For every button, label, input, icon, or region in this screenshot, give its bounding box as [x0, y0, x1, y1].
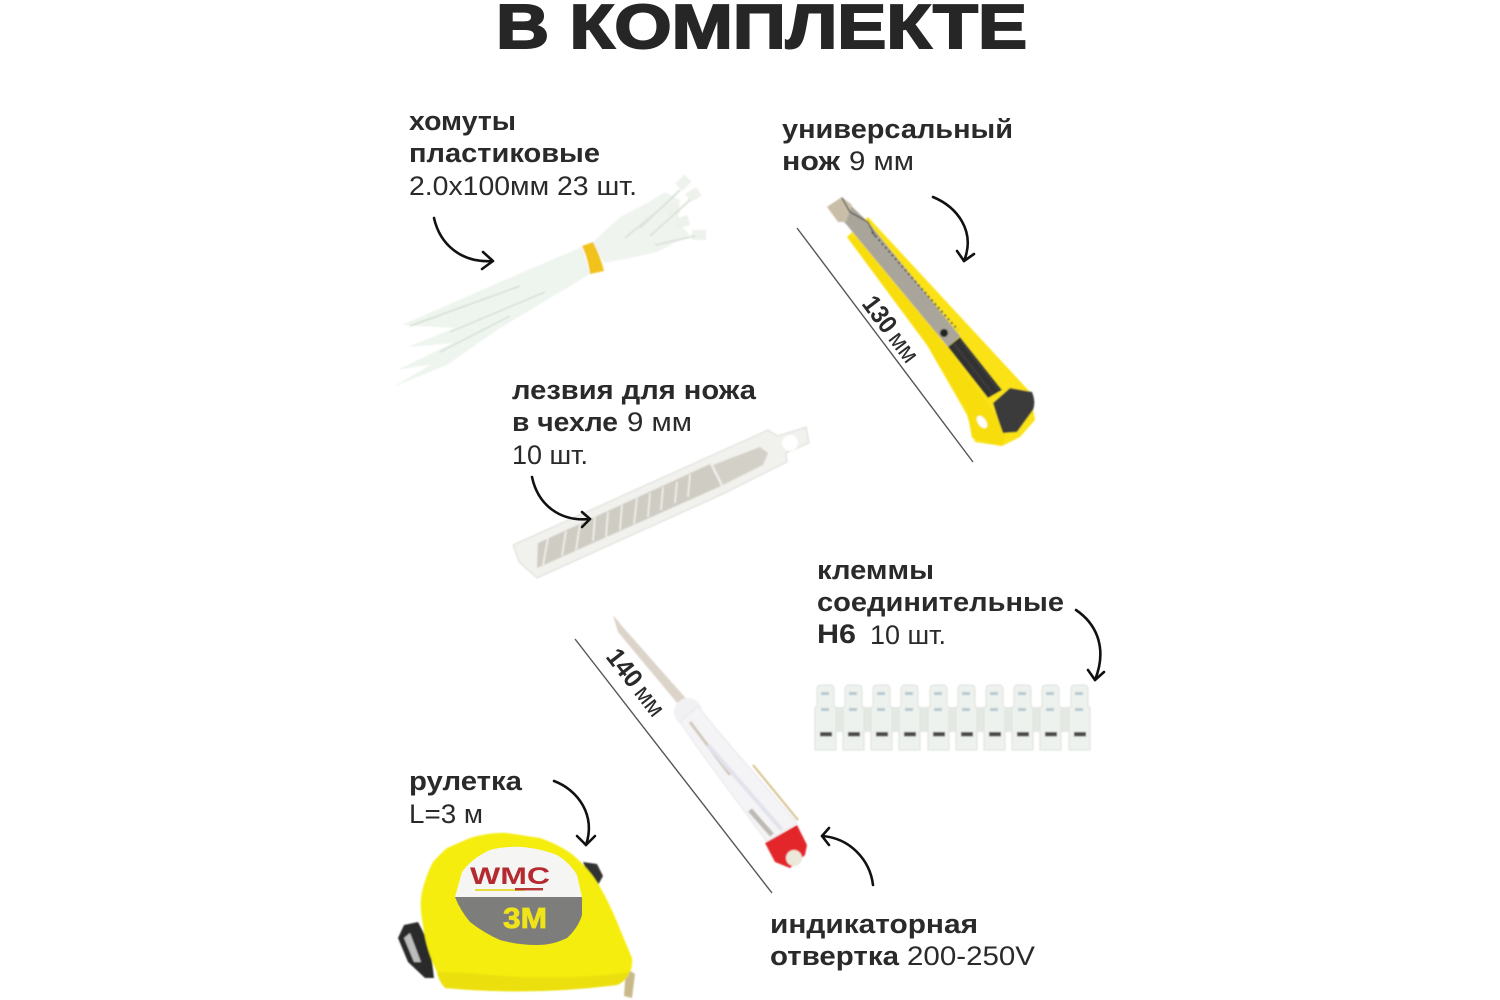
panel: tape measure: [398, 766, 635, 998]
text block: knife label: нож: [782, 146, 841, 176]
dimension label: 140 mm: 140: [600, 642, 649, 693]
arrow: to knife: [933, 197, 974, 261]
text block: blades label: 10 шт.: [512, 440, 588, 470]
text block: knife label: 9 мм: [849, 146, 914, 176]
icon: indicator screwdriver: [613, 615, 807, 868]
text block: tape measure label: [409, 766, 523, 829]
dimension label: 130 mm: мм: [883, 326, 924, 368]
text block: cable ties label: [409, 106, 637, 201]
panel: spare blades: [512, 375, 809, 578]
text block: screwdriver label: 200-250V: [907, 941, 1035, 971]
text: 3M: 3M: [503, 903, 547, 935]
dimension label: 140 mm: мм: [629, 680, 670, 722]
text block: terminals label: клеммы: [817, 555, 934, 585]
panel: terminal blocks: [815, 555, 1104, 750]
text block: tape measure label: L=3 м: [409, 799, 483, 829]
text block: screwdriver label: отвертка: [770, 941, 900, 971]
arrow: to terminals: [1076, 610, 1104, 680]
arrow: to tape measure: [554, 781, 595, 845]
text block: cable ties label: пластиковые: [409, 138, 600, 168]
icon: utility knife: [827, 197, 1035, 446]
text block: terminals label: [817, 555, 1064, 650]
text block: cable ties label: хомуты: [409, 106, 516, 136]
stripe: logo underline: [475, 888, 543, 891]
text block: blades label: в чехле: [512, 407, 618, 437]
text block: cable ties label: 2.0х100мм 23 шт.: [409, 171, 637, 201]
text block: tape measure label: рулетка: [409, 766, 523, 796]
icon: cable ties bundle: [393, 175, 706, 387]
icon: terminal block strip: [815, 685, 1090, 750]
text block: knife label: [782, 114, 1013, 176]
text block: screwdriver label: [770, 909, 1035, 971]
arrow: to blades: [532, 477, 590, 527]
text block: terminals label: Н6: [817, 619, 856, 649]
text block: terminals label: соединительные: [817, 587, 1064, 617]
panel: indicator screwdriver: [575, 615, 1035, 971]
text block: blades label: лезвия для ножа: [512, 375, 757, 405]
arrow: to cable ties: [434, 218, 493, 269]
text block: terminals label: 10 шт.: [870, 620, 946, 650]
dimension line: 130 mm: [797, 228, 973, 462]
icon: blades in case: [513, 427, 809, 578]
text block: screwdriver label: индикаторная: [770, 909, 978, 939]
text block: knife label: универсальный: [782, 114, 1013, 144]
text block: blades label: 9 мм: [627, 407, 692, 437]
panel: cable ties: [393, 106, 706, 387]
dimension label: 130 mm: [856, 290, 926, 368]
icon: tape measure: [398, 833, 635, 998]
label: grey photo: [455, 897, 582, 945]
logo: WMC: WMC: [470, 863, 550, 890]
dimension label: 140 mm: [600, 642, 672, 722]
panel: utility knife: [782, 114, 1035, 462]
dimension line: 140 mm: [575, 639, 772, 893]
text block: blades label: [512, 375, 757, 470]
dimension label: 130 mm: 130: [856, 290, 904, 339]
label: white top: [455, 847, 582, 897]
arrow: to screwdriver: [822, 828, 873, 885]
